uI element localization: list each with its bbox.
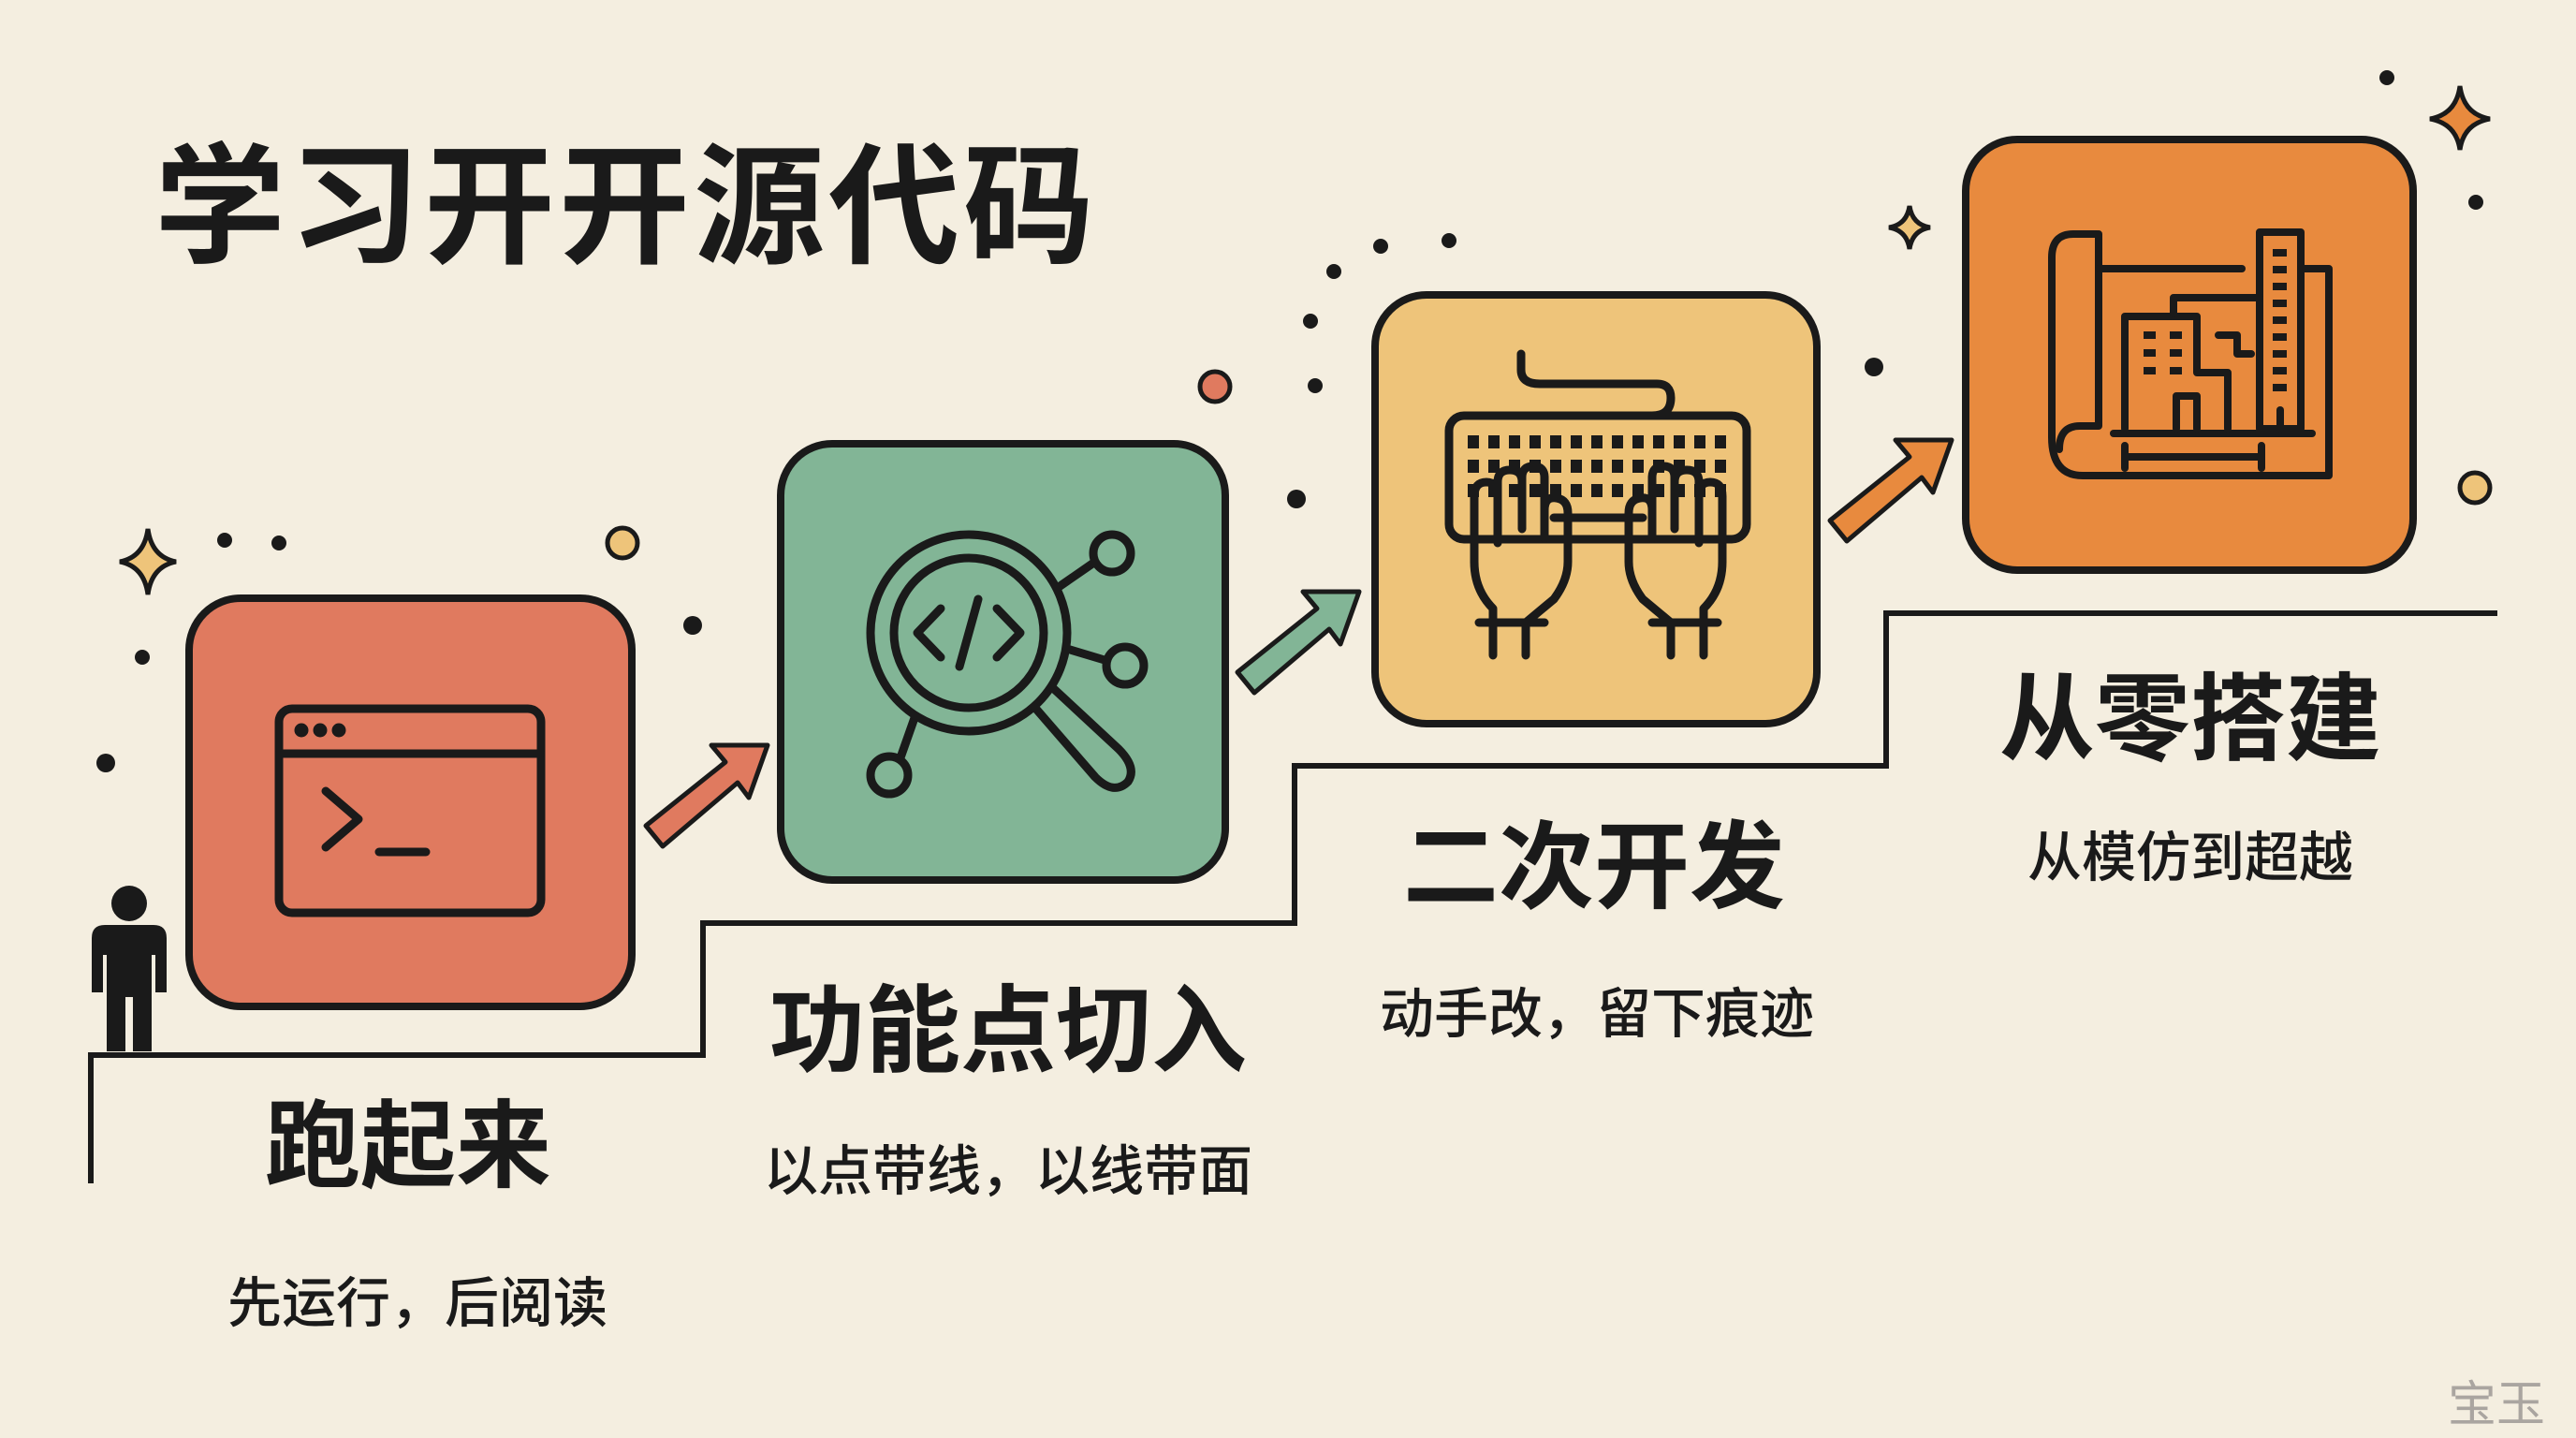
staircase line xyxy=(91,613,2497,1183)
text: step 2 subtitle: 以点带线，以线带面 xyxy=(764,1141,1252,1202)
icon: blueprint buildings xyxy=(2052,232,2329,476)
panel: step 3 box xyxy=(1375,295,1817,724)
decorations: sparkles and dots xyxy=(96,70,2490,772)
text: step 1 subtitle: 先运行，后阅读 xyxy=(227,1273,607,1334)
heading: step 2: 功能点切入 xyxy=(769,978,1247,1085)
heading: step 3: 二次开发 xyxy=(1403,814,1785,921)
title: 学习开开源代码 xyxy=(154,134,1098,281)
arrow: step 3 to 4 xyxy=(1830,440,1952,541)
arrow: step 1 to 2 xyxy=(646,745,768,846)
icon: person xyxy=(92,886,167,1051)
heading: step 1: 跑起来 xyxy=(265,1093,551,1200)
icon: magnifier with code xyxy=(871,535,1144,794)
icon: terminal window xyxy=(279,709,541,913)
watermark: 宝玉 xyxy=(2448,1378,2545,1432)
icon: keyboard with hands xyxy=(1449,354,1747,655)
panel: step 4 box xyxy=(1966,139,2413,570)
arrow: step 2 to 3 xyxy=(1237,592,1359,693)
panel: step 1 box xyxy=(189,598,632,1006)
text: step 3 subtitle: 动手改，留下痕迹 xyxy=(1380,984,1814,1045)
heading: step 4: 从零搭建 xyxy=(1999,667,2381,773)
panel: step 2 box xyxy=(781,444,1225,880)
text: step 4 subtitle: 从模仿到超越 xyxy=(2027,828,2353,888)
